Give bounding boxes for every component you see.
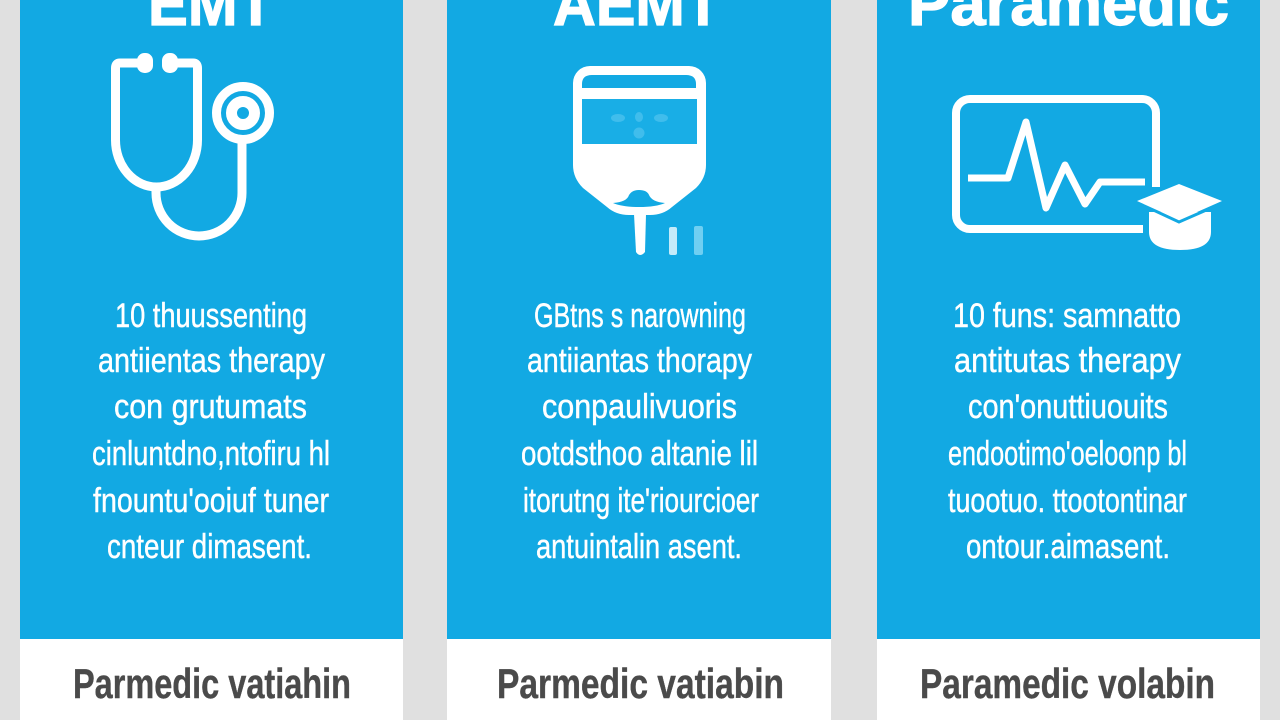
- body text: Paramedic: endootimo'oeloonp bl: [948, 435, 1187, 473]
- icon: heart monitor with graduation cap: [956, 99, 1222, 250]
- footer label: EMT: Parmedic vatiahin: [73, 660, 351, 707]
- panel: AEMT: [447, 0, 831, 720]
- panel background: AEMT: [447, 0, 831, 639]
- footer band: AEMT: [447, 639, 831, 720]
- body text: EMT: cnteur dimasent.: [107, 528, 312, 566]
- body text: Paramedic: [948, 297, 1187, 566]
- body text: Paramedic: 10 funs: samnatto: [953, 297, 1181, 335]
- footer band: EMT: [20, 639, 403, 720]
- icon: stethoscope: [116, 53, 270, 236]
- body text: Paramedic: ontour.aimasent.: [966, 528, 1170, 566]
- footer label: AEMT: Parmedic vatiabin: [497, 660, 784, 707]
- body text: Paramedic: tuootuo. ttootontinar: [948, 482, 1187, 520]
- body text: EMT: antiientas therapy: [98, 342, 325, 380]
- body text: EMT: fnountu'ooiuf tuner: [93, 482, 329, 520]
- body text: AEMT: antiiantas thorapy: [527, 342, 752, 380]
- body text: EMT: cinluntdno,ntofiru hl: [92, 435, 330, 473]
- footer band: Paramedic: [877, 639, 1260, 720]
- body text: Paramedic: antitutas therapy: [954, 342, 1181, 380]
- panel background: EMT: [20, 0, 403, 639]
- icon: IV bag: [573, 66, 706, 255]
- body text: AEMT: antuintalin asent.: [536, 528, 742, 566]
- body text: AEMT: ootdsthoo altanie lil: [521, 435, 758, 473]
- body text: EMT: [92, 297, 330, 566]
- panel: EMT: [20, 0, 403, 720]
- body text: AEMT: GBtns s narowning: [534, 297, 746, 335]
- panel: Paramedic: [877, 0, 1260, 720]
- body text: AEMT: itorutng ite'riourcioer: [523, 482, 759, 520]
- body text: EMT: 10 thuussenting: [115, 297, 307, 335]
- panel background: Paramedic: [877, 0, 1260, 639]
- body text: AEMT: conpaulivuoris: [542, 388, 737, 426]
- body text: EMT: con grutumats: [114, 388, 307, 426]
- body text: Paramedic: con'onuttiuouits: [968, 388, 1168, 426]
- body text: AEMT: [521, 297, 759, 566]
